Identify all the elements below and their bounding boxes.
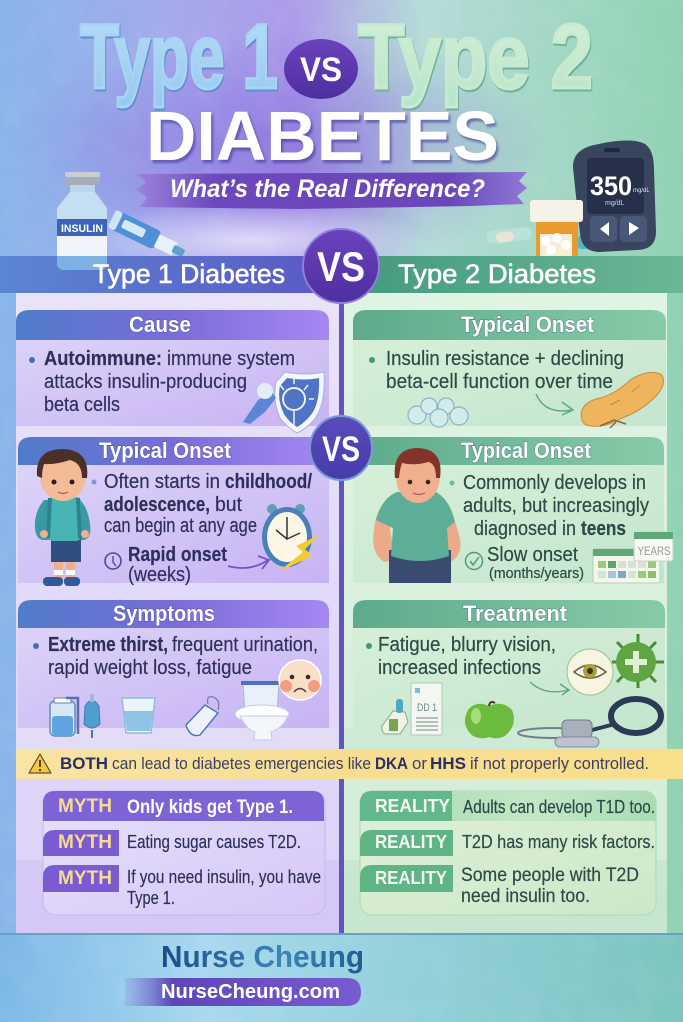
myth 3: If you need insulin, you have [127,867,321,887]
slow onset note: (months/years) [489,565,584,582]
icon: toilet [235,681,289,740]
reality 3: Some people with T2D [461,865,639,886]
bullet text: can begin at any age [104,515,257,537]
myth card [43,791,325,915]
icon: tired face [279,660,321,700]
header: Treatment [463,601,568,626]
rapid onset note: Rapid onset [128,544,227,566]
header: Typical Onset [99,438,232,463]
icon: insulin vial [57,172,107,270]
cause header: Cause [129,312,191,337]
icon: years tag: YEARS [638,544,670,558]
brand name: Nurse Cheung [161,939,364,974]
warning text: HHS [430,754,466,773]
bullet text: Commonly develops in [463,472,646,494]
bullet text: Fatigue, blurry vision, [378,634,556,656]
panel: type 2 typical onset top [353,310,666,428]
arrow: to eye [530,682,569,695]
VS badge middle [310,416,372,480]
header [18,437,329,465]
reality 1 [360,791,656,821]
bullet text: adolescence, [104,494,210,516]
bullet text: Extreme thirst, [48,634,168,656]
myth 3: Type 1. [127,888,175,908]
myth 2 [43,830,301,856]
icon: pancreas [581,372,663,428]
bullet text: rapid weight loss, fatigue [48,657,252,679]
rapid onset note: (weeks) [128,564,191,586]
icon: lightning bolt [278,534,321,572]
floor [344,728,667,749]
bullet text: adults, but increasingly [463,495,649,517]
reality 2 [360,830,655,856]
icon: beta cells [408,398,468,427]
bullet text [450,472,649,540]
myth 1 [43,791,324,821]
bullet text: Often starts in [104,471,220,493]
warning text: can lead to diabetes emergencies like [112,754,371,773]
icon: insulin pen [107,209,188,263]
cause bullet text: Autoimmune: [44,348,162,370]
myth 3: MYTH [58,868,112,889]
header band: Type 2 Diabetes: Type 2 Diabetes [398,259,596,289]
bullet text: Insulin resistance + declining [386,348,624,370]
bullet text: increased infections [378,657,541,679]
bullet text: frequent urination, [172,634,318,656]
panel: treatment [344,600,667,749]
panel: symptoms [16,600,339,749]
panel: type 2 typical onset [353,437,673,583]
header [353,437,664,465]
myth 2: MYTH [58,832,112,853]
icon: water bottle [50,698,78,736]
icon: water glass [122,698,155,733]
warning text: DKA [375,754,408,773]
cause bullet text: beta cells [44,394,120,416]
reality 1: Adults can develop T1D too. [463,797,655,817]
bullet text [92,471,312,537]
body [18,460,329,583]
body [353,620,665,728]
floor [16,728,339,749]
title: Type 1: Type 1 [80,6,278,108]
reality 2: T2D has many risk factors. [462,832,655,852]
icon: stethoscope [518,699,661,747]
title: DIABETES: DIABETES [146,97,499,175]
illustration: adult man [373,448,461,583]
bullet text [366,634,556,679]
icon: IV bag [84,694,100,738]
header [353,600,665,628]
rapid onset note [105,544,227,586]
bullet text: diagnosed in [474,518,576,540]
icon: calendar [593,549,660,583]
VS badge top [303,229,379,303]
header: Typical Onset [461,312,595,337]
icon: glucose meter: 350 [590,171,632,201]
bullet text: childhood/ [225,471,312,493]
title: VS badge [284,39,358,99]
icon: food label card [411,683,442,735]
bullet text: beta-cell function over time [386,371,613,393]
bullet text: but [215,494,242,516]
cause header [16,310,329,340]
heading: Type 1 Diabetes: Type 1 Diabetes [93,259,285,289]
icon: hook [186,697,219,736]
bullet text [33,634,318,679]
subtitle banner: What’s the Real Difference? [170,175,485,203]
icon: inhaler [382,699,408,734]
icon: immune shield [243,372,324,433]
icon: glucose meter: mg/dL [633,188,650,194]
panel: type 1 typical onset [18,437,329,586]
header band left [0,256,342,293]
myth 3 [43,865,321,908]
icon: apple [465,702,514,738]
title: VS badge: VS [300,51,342,89]
panel backgrounds [16,293,667,935]
arrow: to pancreas [536,394,573,415]
header: Symptoms [113,601,215,626]
myth 2: Eating sugar causes T2D. [127,832,301,852]
icon: insulin vial: INSULIN [61,223,103,235]
reality 3: REALITY [375,868,447,888]
footer [0,933,683,1022]
illustration: boy with backpack [35,449,90,586]
icon: eye [567,649,613,695]
icon: warning triangle [29,754,51,773]
icon: glucose meter [573,140,656,252]
header band: Type 2 Diabetes [342,256,683,293]
myth 1: Only kids get Type 1. [127,797,293,818]
header [18,600,329,628]
warning band [16,749,683,779]
VS badge middle: VS [322,430,360,469]
reality 3 [360,865,639,907]
reality 1: REALITY [375,796,450,816]
cause bullet text [29,348,295,416]
icon: glucose meter: mg/dL [605,200,625,207]
panel: myths [43,791,325,915]
reality 3: need insulin too. [461,886,590,907]
slow onset note: Slow onset [487,544,578,566]
header [353,310,666,340]
website pill [125,978,361,1006]
myth 1: MYTH [58,796,112,817]
reality 2: REALITY [375,832,447,852]
arrow: rapid [228,556,269,569]
website pill: NurseCheung.com [161,981,340,1003]
body [18,620,329,728]
cause body [16,330,329,426]
title [80,6,593,175]
warning text: or [412,754,427,773]
cause bullet text: attacks insulin-producing [44,371,247,393]
reality card [360,791,656,915]
header: Typical Onset [461,438,592,463]
bullet text [369,348,624,393]
icon: capsules [485,227,605,249]
body [353,460,664,583]
icon: alarm clock [262,504,312,567]
warning text: if not properly controlled. [470,754,649,773]
icon: pill bottle [530,200,583,257]
title: Type 2: Type 2 [358,6,593,108]
icon: food label card: DD 1 [417,702,437,714]
icon: years tag [634,532,673,561]
icon: germ [612,634,664,688]
bullet text: teens [581,518,626,540]
subtitle banner [136,172,527,209]
panel: cause [16,310,329,433]
warning text [60,754,649,773]
panel: realities [360,791,656,915]
cause bullet text: immune system [167,348,295,370]
slow onset note [466,544,584,582]
warning text: BOTH [60,754,108,773]
body [353,330,666,426]
VS badge top: VS [317,243,365,290]
